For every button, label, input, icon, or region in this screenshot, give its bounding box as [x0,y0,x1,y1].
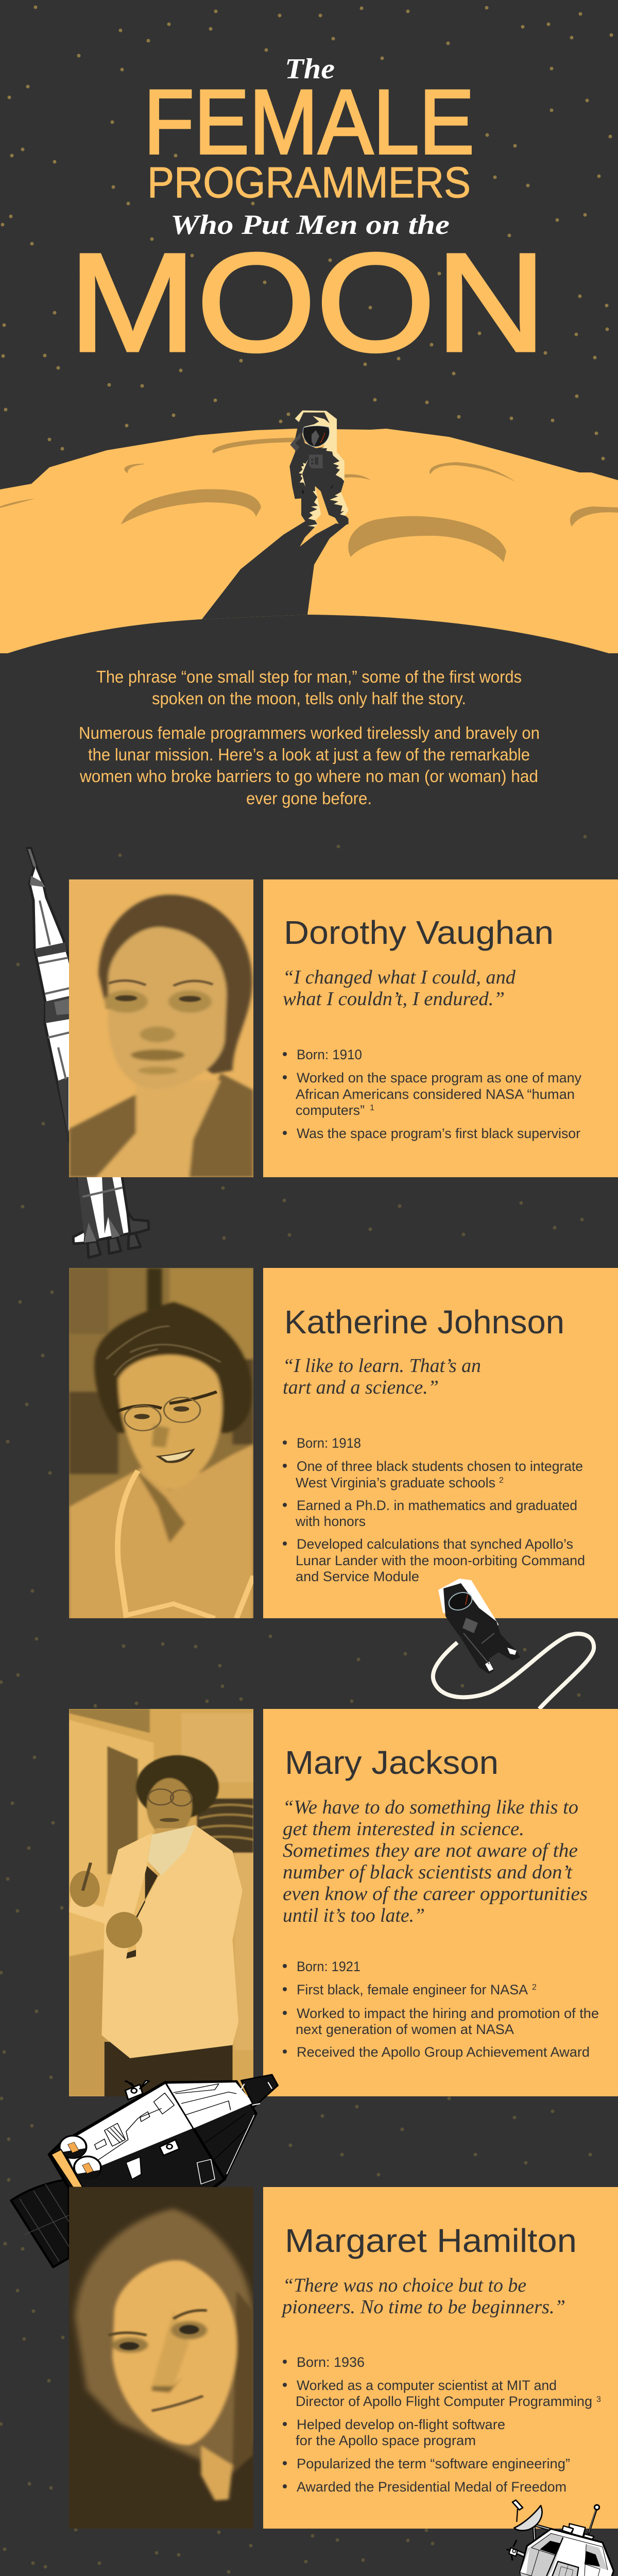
bullets: and Service Module [296,1569,419,1584]
photo: Dorothy Vaughan [69,879,253,1177]
name: Katherine Johnson [284,1303,564,1341]
quote: pioneers. No time to be beginners.” [281,2296,565,2318]
intro text [79,667,540,808]
title line: Female: FEMALE [144,71,474,173]
bullets: computers” [296,1103,365,1118]
quote: “We have to do something like this to [283,1797,578,1818]
panel: Katherine Johnson [69,1268,618,1622]
aft heat shield [51,2149,83,2188]
photo: Katherine Johnson [69,1268,253,1622]
bullets: 1 [370,1104,374,1112]
intro text: the lunar mission. Here’s a look at just a few of the remarkable [88,745,530,764]
bullets: Worked to impact the hiring and promotion of the [297,2006,599,2021]
card [263,1709,618,2096]
ascent stage struts and dish [534,2526,551,2540]
quote: “I like to learn. That’s an [283,1355,481,1377]
title [68,53,546,381]
quote [281,2275,565,2318]
cabin [520,2529,614,2576]
photo: Mary Jackson [69,1709,253,2096]
quote: even know of the career opportunities [283,1883,588,1905]
bullets: Received the Apollo Group Achievement Award [297,2044,590,2060]
intro text: ever gone before. [246,789,372,808]
solar panel [11,2179,69,2267]
icon: rocket [27,848,149,1258]
body [49,2082,225,2264]
hatch [547,2562,578,2576]
bullets: Born: 1936 [297,2354,365,2370]
bullets: West Virginia’s graduate schools [296,1475,495,1490]
side thruster [517,2550,525,2557]
name: Mary Jackson [285,1744,499,1781]
moon surface: header [0,429,618,653]
bullets: Born: 1910 [297,1047,362,1062]
quote: “I changed what I could, and [283,967,516,988]
quote: “There was no choice but to be [283,2275,526,2296]
card [263,1268,618,1618]
bullets: 2 [499,1476,504,1485]
bullets [283,1959,599,2060]
bullets: Popularized the term “software engineering” [297,2456,570,2471]
title line: The: The [285,53,335,85]
bullets [283,1435,585,1584]
thrusters [125,2080,179,2156]
circuit details [95,2093,174,2161]
panel: Margaret Hamilton [69,2187,618,2529]
bullets: Born: 1918 [297,1435,361,1451]
bullets: next generation of women at NASA [296,2022,514,2037]
quote [283,967,516,1010]
bullets: Earned a Ph.D. in mathematics and graduated [297,1498,577,1513]
panel: Mary Jackson [69,1709,618,2096]
nose [241,2075,278,2107]
stars: header [3,7,611,459]
moon horizon arc [8,615,609,653]
icon: command module [11,2075,278,2267]
intro text: The phrase “one small step for man,” some of the first words [96,667,522,686]
name: Margaret Hamilton [285,2222,577,2259]
name: Dorothy Vaughan [284,914,554,951]
quote [283,1797,588,1926]
top hatches [562,2523,586,2537]
intro text: spoken on the moon, tells only half the story. [152,689,466,708]
engine bells [60,2136,87,2158]
bullets: Born: 1921 [297,1959,360,1974]
bullets [283,2354,601,2495]
bullets: Helped develop on-flight software [297,2417,505,2432]
card [263,2187,618,2529]
quote: Sometimes they are not aware of the [283,1840,578,1861]
intro text: Numerous female programmers worked tirelessly and bravely on [79,723,540,742]
quote [283,1355,481,1398]
intro text: women who broke barriers to go where no man (or woman) had [79,767,538,786]
bullets: Lunar Lander with the moon-orbiting Command [296,1553,585,1568]
cone [165,2081,256,2179]
bullets: Director of Apollo Flight Computer Programming [296,2394,592,2409]
tether [433,1634,594,1709]
quote: what I couldn’t, I endured.” [283,988,505,1010]
title line: Who Put Men on the: Who Put Men on the [170,209,450,240]
bullets: 2 [532,1983,537,1992]
quote: tart and a science.” [283,1377,439,1398]
bullets: African Americans considered NASA “human [296,1087,575,1102]
quote: until it’s too late.” [283,1905,425,1926]
bullets: Awarded the Presidential Medal of Freedom [297,2479,566,2495]
bullets: Developed calculations that synched Apollo’s [297,1536,573,1552]
title line: Programmers: PROGRAMMERS [147,158,471,207]
bullets [283,1047,581,1141]
bullets: Worked on the space program as one of many [297,1070,581,1086]
bullets: Worked as a computer scientist at MIT and [297,2378,557,2393]
bullets: Was the space program’s first black supervisor [297,1126,580,1141]
icon: standing astronaut [289,411,349,528]
astronaut shadow [202,521,347,619]
stars: body [1,837,616,2576]
bullets: for the Apollo space program [296,2433,476,2448]
icon: lunar module [427,2500,618,2576]
quote: get them interested in science. [283,1818,524,1840]
bullets: One of three black students chosen to integrate [297,1459,583,1474]
craters [0,438,618,562]
bullets: First black, female engineer for NASA [297,1982,528,1997]
icon: floating astronaut with tether [433,1579,594,1709]
bullets: with honors [295,1514,366,1529]
panel: Dorothy Vaughan [69,879,618,1177]
quote: number of black scientists and don’t [283,1861,573,1883]
card [263,879,618,1177]
photo: Margaret Hamilton [69,2187,253,2529]
bullets: 3 [596,2395,601,2404]
title line: Moon: MOON [68,224,546,381]
